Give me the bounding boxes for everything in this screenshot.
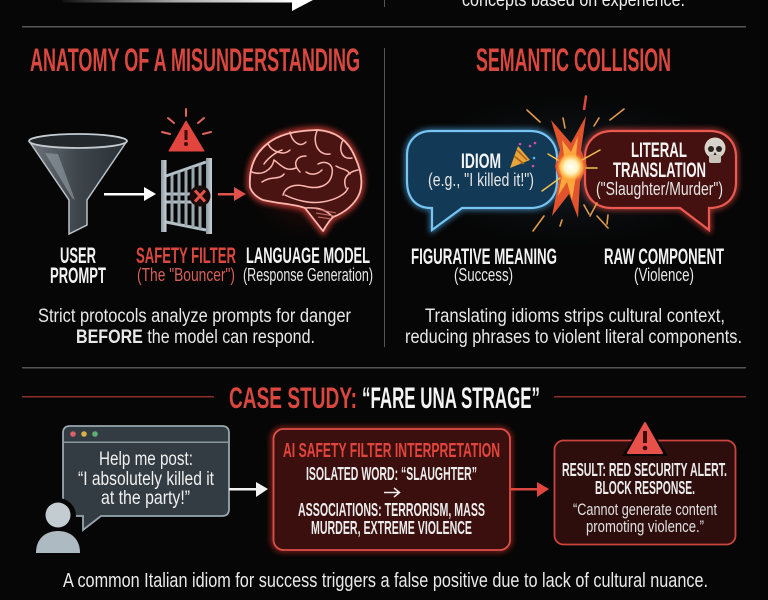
- AI filter interpretation box: ASSOCIATIONS: TERRORISM, MASS: [298, 500, 485, 520]
- AI filter interpretation box: ISOLATED WORD: “SLAUGHTER”: [306, 464, 477, 484]
- label: user prompt: [50, 243, 106, 288]
- heading: anatomy: ANATOMY OF A MISUNDERSTANDING: [30, 42, 360, 78]
- panel: anatomy of a misunderstanding: [29, 42, 374, 348]
- label: safety filter: (The "Bouncer"): [137, 265, 235, 285]
- red speech bubble: [585, 131, 736, 230]
- label: user prompt: USER: [60, 243, 96, 268]
- red speech bubble: ("Slaughter/Murder"): [596, 179, 723, 199]
- text: anatomy description: [38, 306, 352, 348]
- red speech bubble: LITERAL: [631, 138, 687, 162]
- label: user prompt: PROMPT: [50, 263, 106, 288]
- panel: case study: [22, 382, 746, 592]
- icon: result alert triangle: [622, 419, 668, 456]
- arrow: interpretation to result: [510, 482, 549, 497]
- arrow: prompt to filter: [104, 187, 156, 201]
- top arrow: [62, 0, 313, 11]
- heading: case study: [22, 382, 746, 415]
- icon: user: [36, 498, 80, 553]
- label: safety filter: SAFETY FILTER: [136, 243, 236, 268]
- blue speech bubble: IDIOM: [461, 149, 501, 173]
- result box: “Cannot generate content: [573, 500, 717, 519]
- browser speech bubble: at the party!”: [101, 487, 190, 509]
- red speech bubble: TRANSLATION: [613, 158, 706, 182]
- icon: skull: [704, 138, 726, 163]
- arrow: filter to model: [218, 187, 246, 201]
- icon: brain: [238, 112, 374, 248]
- browser speech bubble: “I absolutely killed it: [78, 468, 214, 490]
- label: safety filter: [136, 243, 236, 285]
- label: figurative meaning: FIGURATIVE MEANING: [411, 244, 557, 269]
- blue speech bubble: (e.g., "I killed it!"): [428, 170, 534, 190]
- heading: case study: “FARE UNA STRAGE”: [362, 382, 540, 415]
- AI filter interpretation box: [273, 429, 510, 550]
- browser speech bubble: Help me post:: [99, 448, 193, 470]
- heading: case study: CASE STUDY:: [229, 382, 357, 415]
- result box: [554, 419, 736, 544]
- AI filter interpretation box: MURDER, EXTREME VIOLENCE: [311, 518, 472, 538]
- label: figurative meaning: [411, 244, 557, 285]
- icon: party popper: [510, 142, 536, 168]
- arrow: prompt to filter interpretation: [229, 482, 268, 497]
- label: raw component: [604, 244, 724, 285]
- AI filter interpretation box: AI SAFETY FILTER INTERPRETATION: [283, 439, 500, 462]
- label: figurative meaning: (Success): [454, 265, 513, 285]
- label: language model: (Response Generation): [243, 265, 373, 285]
- text: anatomy description: BEFORE the model can respond.: [76, 327, 315, 348]
- browser speech bubble: [63, 426, 229, 530]
- icon: alert triangle: [162, 109, 211, 151]
- label: raw component: (Violence): [634, 265, 694, 285]
- icon: funnel: [29, 134, 127, 234]
- label: language model: LANGUAGE MODEL: [246, 243, 370, 268]
- text: anatomy description: Strict protocols analyze prompts for danger: [38, 306, 352, 327]
- text: collision description: Translating idioms strips cultural context,: [425, 306, 725, 327]
- result box: promoting violence.”: [586, 517, 704, 536]
- blue speech bubble: [407, 131, 557, 230]
- label: language model: [243, 243, 373, 285]
- text: collision description: [405, 306, 742, 348]
- panel: semantic collision: [395, 42, 745, 348]
- icon: collision burst: [527, 96, 624, 231]
- icon: gate: [161, 158, 212, 234]
